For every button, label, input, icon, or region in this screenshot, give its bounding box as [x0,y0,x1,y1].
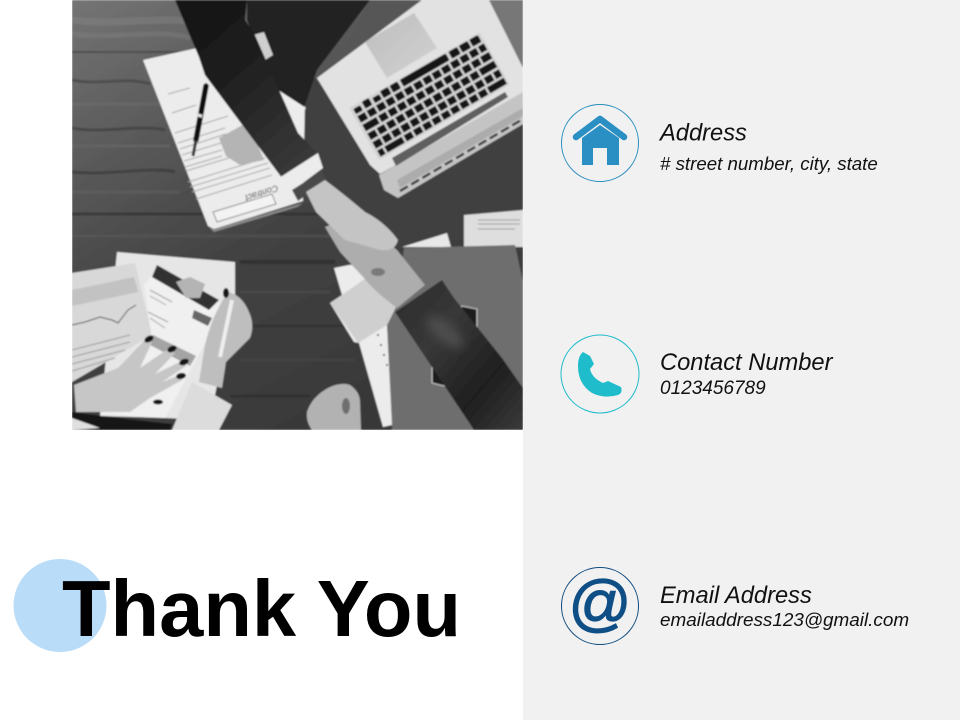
photo: business handshake over desk [72,0,523,430]
clipboard paper [101,278,220,419]
circle accent behind title [14,559,106,652]
sheet behind folder [402,233,451,247]
right sleeve [395,280,523,430]
white page edge [253,32,273,62]
keyboard [349,32,510,160]
blouse cuffs [72,382,232,430]
hand under arm [219,122,264,165]
handshake hands [306,180,425,308]
address text: # street number, city, state [660,153,878,174]
icon: at sign: @ [569,569,631,638]
fist [307,384,361,430]
shirt cuff [280,152,324,184]
contact item: email [562,568,909,644]
clipboard clip [152,265,219,310]
contact number text: 0123456789 [660,378,766,399]
back paper [100,252,235,420]
pen [193,86,206,156]
trackpad [365,13,437,78]
icon: phone [561,335,639,413]
address heading: Address [658,120,747,146]
contract on clipboard: Contract [244,183,279,203]
email heading: Email Address [660,583,812,609]
contact item: phone [561,335,834,413]
panel: contact background [523,0,960,720]
phone under sleeve [432,306,477,386]
email text: emailaddress123@gmail.com [660,610,909,631]
wood desk [72,0,523,430]
laptop [317,0,523,198]
watch [292,171,326,201]
contact item: address [562,104,878,182]
title: Thank You [62,564,461,653]
left hand with dark nails [74,334,190,412]
back sleeve [247,0,370,108]
right hand with pencil [199,288,252,388]
top-right paper [464,210,523,247]
chart paper [72,263,152,382]
front sleeve [174,0,308,178]
loose paper [330,262,400,427]
contact number heading: Contact Number [660,350,834,376]
icon: house [562,104,638,182]
folder [387,245,523,430]
contract on clipboard [143,33,305,232]
